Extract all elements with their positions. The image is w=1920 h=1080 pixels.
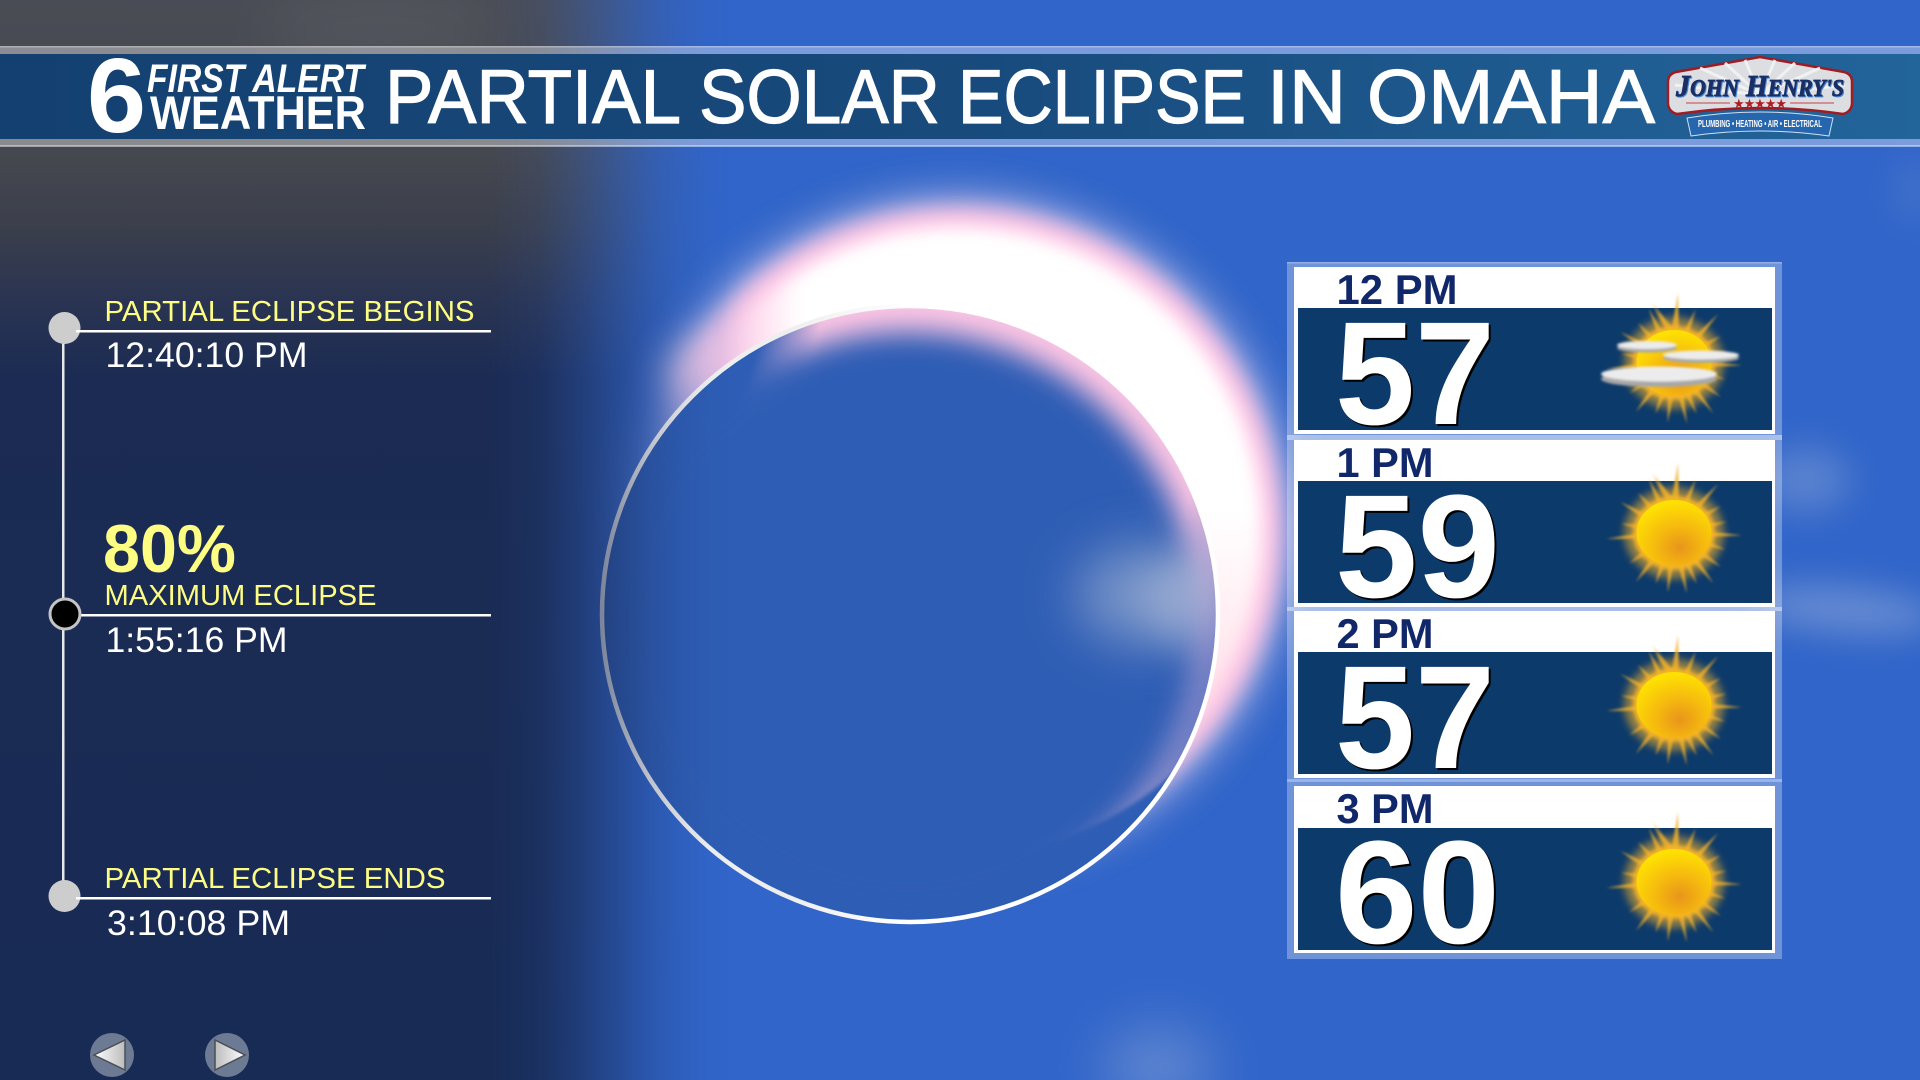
forecast row: 2 PM: 57 — [1335, 636, 1495, 800]
previous arrow button — [90, 1033, 134, 1077]
eclipse: moon outline ring — [602, 306, 1218, 922]
forecast table frame — [1287, 262, 1782, 959]
title — [385, 55, 1655, 140]
timeline: maximum eclipse — [50, 511, 491, 660]
timeline: partial eclipse begins — [48, 296, 491, 375]
eclipse: sun crescent behind the moon — [618, 191, 1298, 871]
wispy clouds in the sky — [1103, 160, 1920, 1080]
station logo: 6 First Alert Weather: 6 — [87, 37, 146, 155]
title: OMAHA — [1367, 55, 1655, 140]
station logo: 6 First Alert Weather: FIRST ALERT — [147, 57, 367, 101]
timeline: partial eclipse begins: PARTIAL ECLIPSE BEGINS — [104, 296, 474, 328]
timeline: partial eclipse ends — [48, 863, 491, 943]
title: ECLIPSE — [958, 55, 1246, 140]
sponsor logo: John Henry's: PLUMBING • HEATING • AIR • ELECTRICAL — [1698, 119, 1822, 130]
forecast row: 3 PM — [1294, 785, 1775, 975]
timeline: maximum eclipse: 80% — [103, 511, 236, 587]
sponsor logo: John Henry's: ★★★★★ — [1733, 96, 1787, 111]
title: PARTIAL — [385, 55, 681, 140]
timeline: maximum eclipse: 1:55:16 PM — [106, 621, 288, 660]
dark left panel background — [0, 0, 730, 1080]
eclipse: moon disc with inner glow — [604, 308, 1216, 920]
station logo: 6 First Alert Weather — [87, 37, 367, 155]
forecast row: 2 PM — [1294, 610, 1775, 800]
forecast row: 3 PM: 60 — [1335, 811, 1500, 975]
station logo: 6 First Alert Weather: WEATHER — [150, 86, 366, 139]
sponsor logo: John Henry's: JOHN HENRY'S — [1675, 68, 1844, 103]
forecast row: 2 PM: 2 PM — [1336, 610, 1434, 657]
timeline: partial eclipse ends: 3:10:08 PM — [107, 904, 290, 943]
forecast row: 12 PM: 12 PM — [1336, 266, 1458, 313]
sponsor logo: John Henry's — [1668, 57, 1852, 136]
forecast row: 12 PM — [1294, 266, 1775, 456]
forecast row: 12 PM: 57 — [1335, 292, 1495, 456]
forecast row: 1 PM: 59 — [1335, 465, 1500, 629]
timeline: partial eclipse ends: PARTIAL ECLIPSE ENDS — [104, 863, 446, 895]
title: IN — [1267, 55, 1346, 140]
forecast row: 1 PM — [1294, 439, 1775, 629]
subtle highlight at top left — [260, 0, 500, 70]
forecast row: 1 PM: 1 PM — [1336, 439, 1434, 486]
title banner — [0, 46, 1920, 147]
timeline vertical line — [62, 330, 64, 900]
timeline: partial eclipse begins: 12:40:10 PM — [106, 336, 308, 375]
forecast row: 3 PM: 3 PM — [1336, 785, 1434, 832]
title: SOLAR — [699, 55, 940, 140]
timeline: maximum eclipse: MAXIMUM ECLIPSE — [104, 580, 376, 612]
next arrow button — [205, 1033, 249, 1077]
